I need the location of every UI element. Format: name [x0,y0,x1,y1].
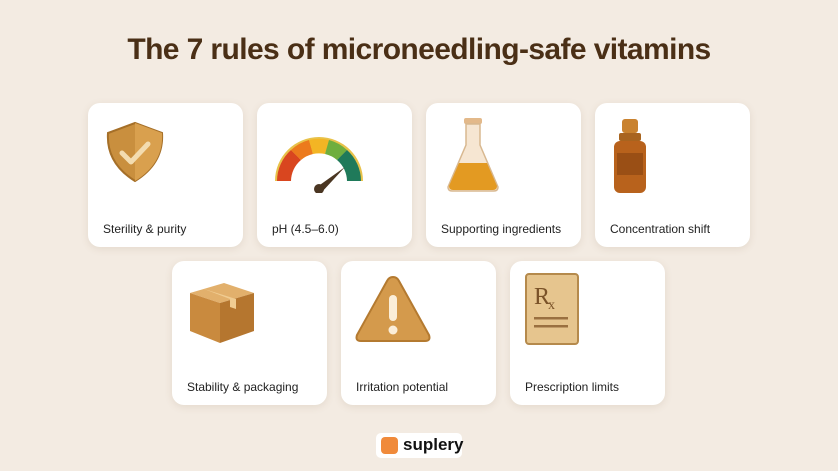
logo icon [381,437,398,454]
label: Stability & packaging [187,380,298,394]
icon: Rx note [525,273,579,345]
icon: shield [106,122,164,182]
label: pH (4.5–6.0) [272,222,339,236]
label: Prescription limits [525,380,619,394]
icon: gauge [275,137,363,193]
label: Supporting ingredients [441,222,561,236]
icon: box [190,283,254,343]
card: concentration [595,103,750,247]
logo text: suplery [403,435,463,454]
icon: flask [447,118,499,192]
icon: Rx note: x [548,298,555,313]
label: Concentration shift [610,222,710,236]
card: prescription [510,261,665,405]
card: supporting ingredients [426,103,581,247]
icon: Rx note: R [534,284,550,310]
label: Irritation potential [356,380,448,394]
icon: warning triangle [356,276,430,342]
logo [376,433,462,458]
card: pH [257,103,412,247]
card: irritation [341,261,496,405]
card: sterility [88,103,243,247]
label: Sterility & purity [103,222,186,236]
title: The 7 rules of microneedling-safe vitamins [127,33,711,66]
card: stability [172,261,327,405]
icon: dropper bottle [614,119,646,193]
